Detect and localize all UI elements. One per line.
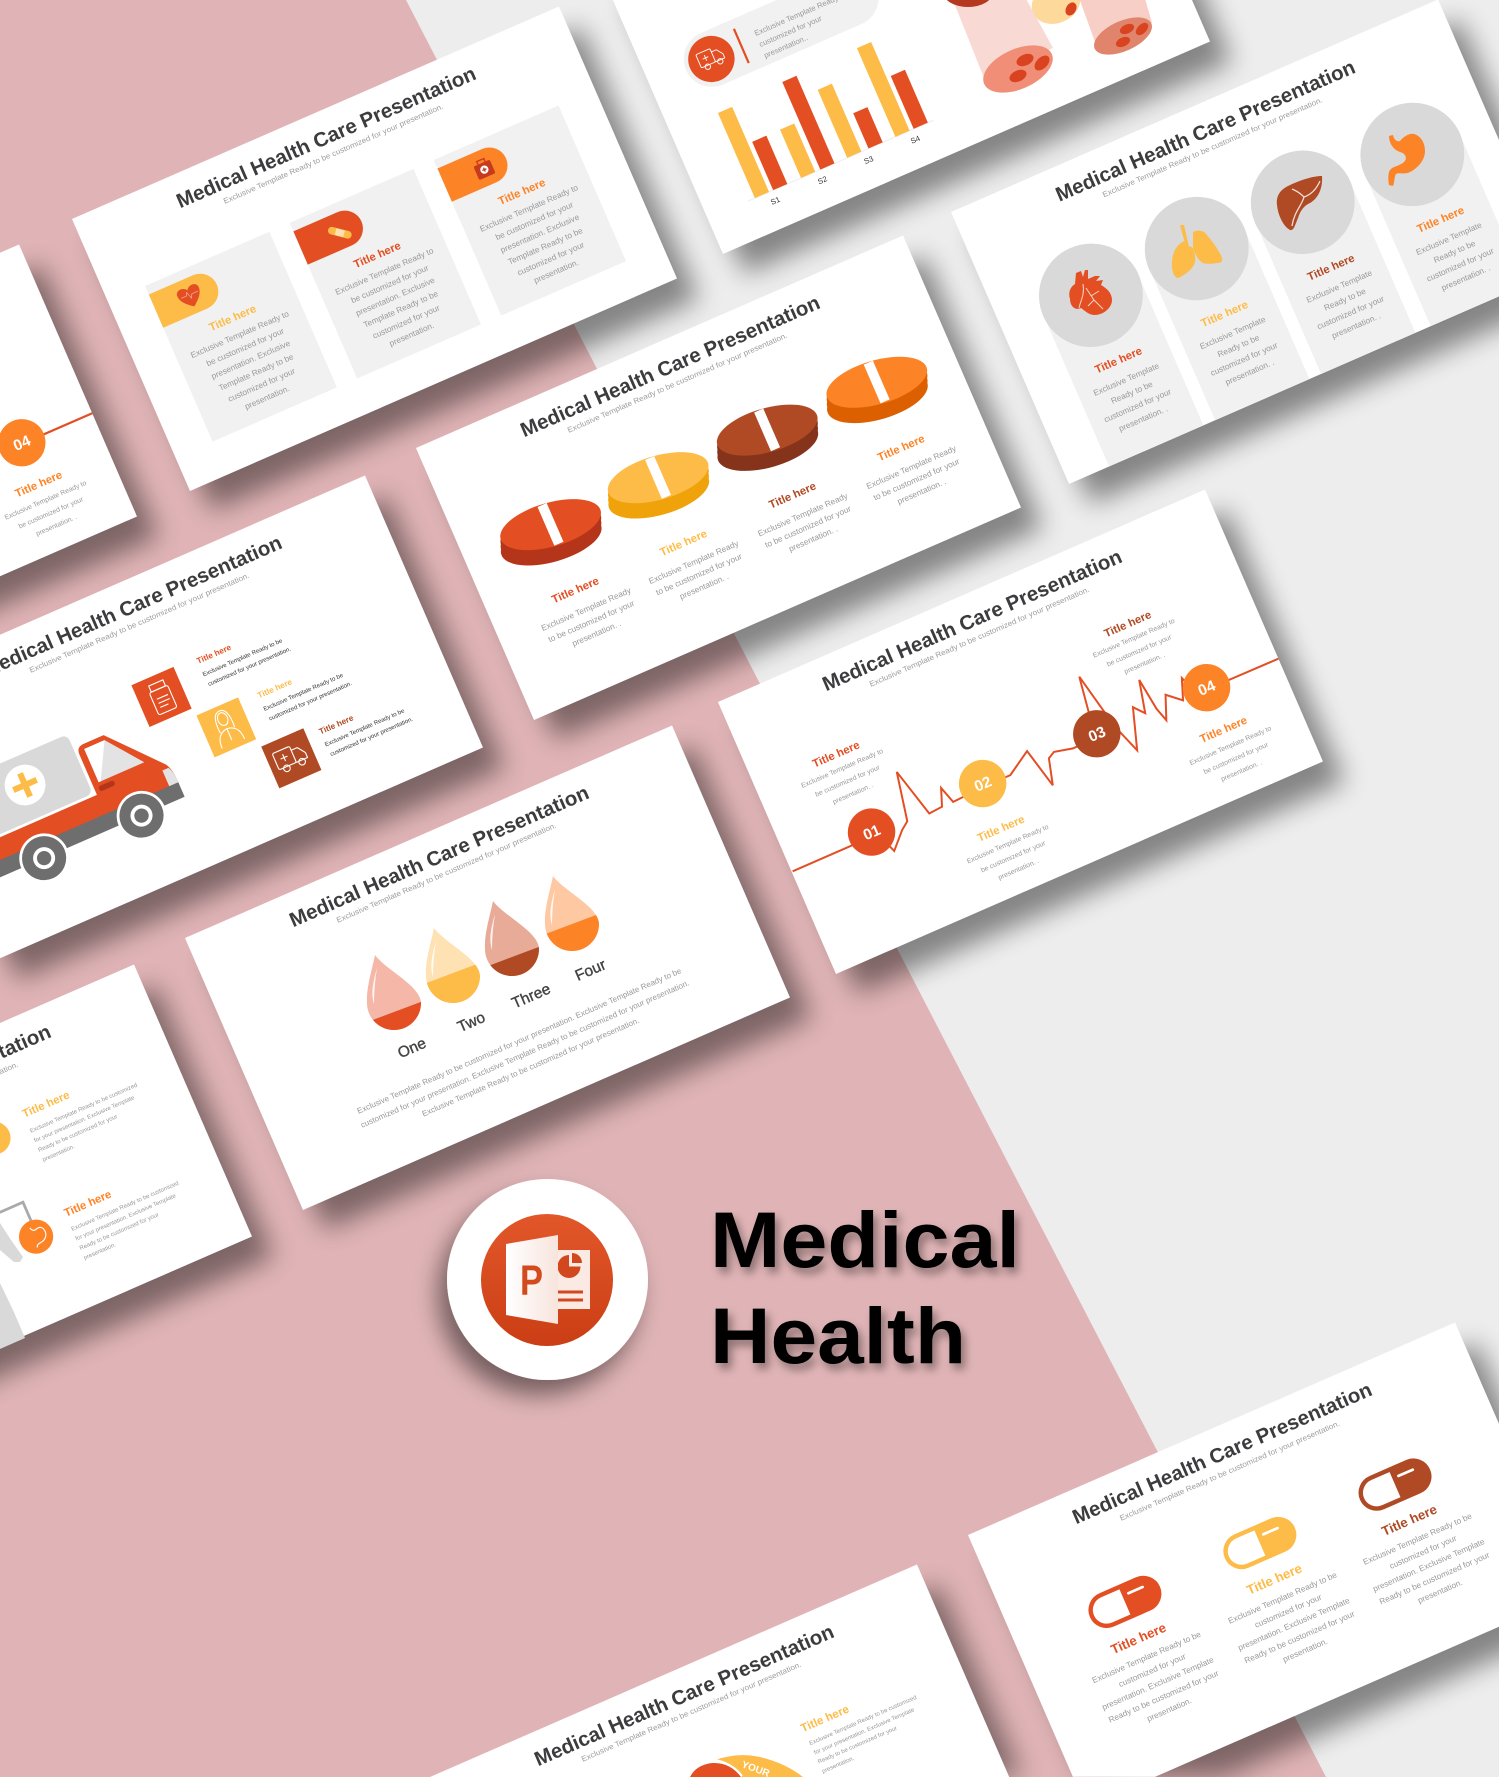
column: heart: Title here [1093,345,1144,376]
card 2: presentation. [388,321,435,348]
column: liver: Exclusive Template [1305,268,1374,305]
step 02: presentation. . [997,858,1040,882]
pill 3: to be customized for your [764,504,853,550]
step 04 body: Exclusive Template Ready to [4,480,88,522]
icon: heart [1069,270,1112,315]
step 04 body: be customized for your [18,496,85,531]
card 3: Template Ready to be [507,226,584,267]
callout: stomach: Exclusive Template Ready to be customized [71,1181,180,1233]
slide: capsule pills [416,235,1021,720]
drop four [544,876,599,951]
pill 4: Exclusive Template Ready [865,444,958,491]
slide subtitle: Exclusive Template Ready to be customized for your presentation. [335,821,558,925]
column: lungs: customized for your [1209,341,1279,378]
item 3: ambulance [261,686,417,788]
step 04 body: presentation. . [35,514,78,538]
callout: stomach: for your presentation. Exclusive Template [75,1193,178,1242]
capsule 2: Ready to be customized for your [1243,1609,1356,1665]
slide: body anatomy [0,964,252,1449]
slide subtitle: Exclusive Template Ready to be customized for your presentation. [1118,1419,1341,1523]
column: heart: Ready to be [1110,379,1155,406]
step 02: Exclusive Template Ready to [966,824,1050,866]
card 3: Exclusive Template Ready to [479,183,580,234]
pill 2: to be customized for your [655,552,744,597]
capsule 2: Exclusive Template Ready to be [1227,1570,1339,1626]
item 1: bottle [131,621,297,727]
slide title: Medical Health Care Presentation [173,63,479,213]
drops description: customized for your presentation. Exclusive Template Ready to be customized for your presentation. [359,978,691,1130]
step 01 [793,732,920,872]
callout: stomach [0,1142,192,1289]
step 03: be customized for your [1106,634,1173,668]
bar chart: S1 [769,195,781,207]
step 02 [932,745,1061,891]
card 2: Title here [352,240,403,271]
card 2 [290,169,481,378]
slide title: Medical Health Care Presentation [517,292,823,442]
column: liver: customized for your [1316,294,1386,331]
column: liver: Ready to be [1323,287,1368,313]
callout text: for your presentation. Exclusive Template [813,1707,916,1756]
item 3: ambulance: customized for your presentation. [330,717,414,758]
step 04 number: 04 [11,432,34,455]
card 2: be customized for your [350,263,430,305]
item 2: doctor: Exclusive Template Ready to be [263,673,345,713]
column: stomach: presentation. . [1440,263,1492,293]
drop two [426,928,480,1003]
drops description: Exclusive Template Ready to be customized for your presentation. Exclusive Template Ready to be [356,966,683,1116]
card 2: Template Ready to be [362,289,440,330]
step 01: Title here [811,739,862,770]
pill 3 [701,382,866,567]
column: heart: customized for your [1103,387,1173,424]
pill 4: Title here [876,433,927,464]
card 3: Title here [497,177,547,208]
icon: liver [1277,176,1322,230]
capsule 1: customized for your [1117,1652,1187,1689]
drop labels: Four [573,956,609,985]
column: liver: presentation. . [1331,311,1382,341]
pill 2: Exclusive Template Ready [647,539,741,586]
capsule 2: presentation. Exclusive Template [1237,1596,1351,1653]
icon: PowerPoint badge: P [520,1257,543,1305]
headline: Health [710,1291,966,1380]
pill 1: to be customized for your [547,599,636,644]
pill 4: presentation. . [896,477,948,506]
callout text [799,1677,930,1776]
callout: upper organ: Title here [21,1089,72,1120]
headline [710,1195,1020,1380]
pill 1: presentation. . [571,619,623,648]
bar chart: S4 [909,133,922,146]
callout text: Title here [799,1703,852,1735]
slide title: Medical Health Care Presentation [1053,57,1359,206]
capsule 3: presentation. [1416,1578,1464,1605]
step 04: Title here [1198,715,1249,746]
column: stomach [1344,86,1499,326]
step 02: 02 [972,773,994,796]
step 01: Exclusive Template Ready to [800,748,884,790]
card 2: customized for your [371,303,441,341]
column: lungs: Title here [1199,299,1250,330]
pill 3: presentation. . [787,524,839,554]
card 2: Exclusive Template Ready to [334,246,435,297]
step 03: presentation. . [1123,652,1166,676]
item 3: ambulance: Title here [318,713,355,736]
slide: three cards [72,6,677,491]
step 04 marker [0,412,53,474]
slide: heartbeat timeline [718,489,1323,974]
slide: blood drops [185,725,790,1210]
item 1: bottle: Title here [195,643,233,666]
capsule 1: presentation. Exclusive Template [1101,1655,1216,1712]
drop one [366,955,421,1030]
callout: upper organ: Exclusive Template Ready to be customized [29,1083,138,1135]
icon: lungs [1172,225,1222,278]
slide: ambulance [0,475,483,960]
pill 3: Title here [767,480,818,511]
capsule 1: Exclusive Template Ready to be [1091,1630,1203,1685]
drop labels: Three [509,981,553,1012]
slide subtitle: Exclusive Template Ready to be customized for your presentation. [580,1660,803,1764]
slide title: Medical Health Care Presentation [819,546,1125,696]
callout: upper organ: Ready to be customized for your [38,1114,119,1154]
slide title: Medical Health Care Presentation [1069,1379,1375,1529]
card 1 [145,232,337,442]
capsule 1 [1061,1564,1227,1738]
bar chart: S2 [816,174,829,186]
slide subtitle: Exclusive Template Ready to be customized for your presentation. [28,571,251,675]
step 03 [1038,601,1213,765]
step 03: 03 [1086,723,1109,746]
callout text: Ready to be customized for your [817,1726,898,1765]
pill 2: presentation. . [678,572,730,601]
step 02: be customized for your [980,840,1047,874]
drop labels [395,956,609,1062]
card 3: presentation. Exclusive [499,212,581,255]
column: heart: Exclusive Template [1092,361,1161,398]
card 1: presentation. [243,384,291,411]
capsule 3: Exclusive Template Ready to be [1362,1511,1474,1567]
callout: upper organ: for your presentation. Exclusive Template [33,1095,136,1144]
ECG line [767,601,1289,896]
ambulance truck illustration [0,701,194,910]
card 1: be customized for your [205,326,286,368]
slide: ECG fragment with step 04 [0,244,137,729]
item 2: doctor: customized for your presentation. [268,681,353,722]
slide subtitle: Exclusive Template Ready to be customized for your presentation. [566,331,789,435]
pill 4: to be customized for your [872,457,961,502]
drops description: Exclusive Template Ready to be customized for your presentation. [421,1016,641,1119]
step 04: be customized for your [1203,741,1270,776]
capsule 2: customized for your [1253,1593,1323,1630]
item 2: doctor [196,653,357,757]
slide subtitle: Exclusive Template Ready to be customized for your presentation. [1101,95,1324,199]
column: liver [1235,134,1416,374]
pill 3: Exclusive Template Ready [757,491,850,538]
drop labels: One [395,1035,429,1062]
capsule 1: presentation. [1146,1696,1193,1723]
card 1: Template Ready to be [218,352,295,393]
callout pill [675,0,887,96]
slide: organs [951,0,1499,484]
capsule 3: customized for your [1388,1534,1458,1571]
column: stomach: customized for your [1425,246,1495,284]
icon: stomach [1388,134,1425,186]
capsule 3 [1332,1446,1498,1620]
step 04: presentation. . [1220,759,1263,783]
item 2: doctor: Title here [256,677,294,700]
capsule 1: Ready to be customized for your [1107,1669,1220,1725]
callout text: presentation. [821,1756,856,1775]
column: lungs [1128,180,1310,420]
card 1: presentation. Exclusive [210,339,292,381]
callout: stomach: Ready to be customized for your [79,1212,160,1252]
slide title: Medical Health Care Presentation [531,1621,837,1771]
item 3: ambulance: Exclusive Template Ready to be [324,708,406,748]
slide: pie chart (cropped) [430,1564,1009,1777]
step 04: 04 [1196,677,1219,700]
slide title: Medical Health Care Presentation [286,782,592,932]
step 04: Exclusive Template Ready to [1189,725,1273,767]
pill tubes illustration [943,0,1157,102]
card 3: presentation. [533,258,580,285]
bar chart: S3 [863,154,875,166]
column: lungs: Exclusive Template [1199,315,1267,351]
pie chart [690,1755,803,1777]
column: stomach: Title here [1415,205,1466,236]
capsule 2 [1197,1504,1363,1679]
item 1: bottle: customized for your presentation. [207,646,292,688]
card 3 [434,106,626,316]
column: liver: Title here [1306,252,1357,284]
step 03: Title here [1103,609,1153,640]
capsule 2: Title here [1244,1561,1304,1598]
column: stomach: Exclusive Template [1415,220,1483,257]
callout: stomach: presentation. [83,1242,117,1262]
step 01: be customized for your [814,764,882,799]
card 3: be customized for your [494,200,575,242]
callout pill: customized for your [758,14,824,49]
pill 2 [592,430,757,614]
callout pill: presentation.. [763,33,809,60]
capsule 3: presentation. Exclusive Template [1372,1537,1486,1594]
headline: Medical [710,1195,1020,1284]
card 2: presentation. Exclusive [355,276,437,318]
step 04 [1156,649,1284,792]
callout: stomach: Title here [63,1189,113,1220]
human figure [0,1223,25,1349]
step 02: Title here [976,814,1027,845]
column: stomach: Ready to be [1432,239,1477,265]
slide: bar chart [605,0,1210,254]
pill 2: Title here [658,528,709,559]
capsule 3: Title here [1379,1502,1439,1539]
slide: capsules [968,1322,1499,1777]
card 1: customized for your [227,366,297,404]
bar chart [710,32,939,215]
column: lungs: Ready to be [1216,333,1261,359]
capsule 2: presentation. [1282,1637,1329,1664]
step 04 heading: Title here [13,469,64,500]
step 03: Exclusive Template Ready to [1092,618,1176,660]
card 1: Exclusive Template Ready to [189,309,291,360]
callout: upper organ: presentation. [42,1144,76,1163]
item 1: bottle: Exclusive Template Ready to be [202,638,284,678]
step 01: 01 [861,822,884,844]
callout text: Exclusive Template Ready to be customized [809,1695,918,1747]
pill 1 [484,477,649,661]
card 3: customized for your [516,240,586,277]
pill 4 [810,334,976,519]
capsule 3: Ready to be customized for your [1378,1550,1491,1606]
card 1: Title here [207,303,258,334]
drop labels: Two [455,1009,488,1036]
column: heart [1023,227,1204,467]
column: heart: presentation. . [1117,404,1169,434]
drop three [484,901,539,976]
capsule 1: Title here [1108,1620,1168,1657]
slide subtitle: Exclusive Template Ready to be customized for your presentation. [868,585,1091,689]
slide subtitle: Exclusive Template Ready to be customized for your presentation. [222,102,445,206]
step 01: presentation. . [832,782,875,806]
pill 1: Exclusive Template Ready [540,586,633,633]
icon: PowerPoint badge [447,1179,648,1380]
callout: upper organ [0,1062,151,1184]
pill 1: Title here [550,575,601,606]
column: lungs: presentation. . [1224,358,1276,387]
